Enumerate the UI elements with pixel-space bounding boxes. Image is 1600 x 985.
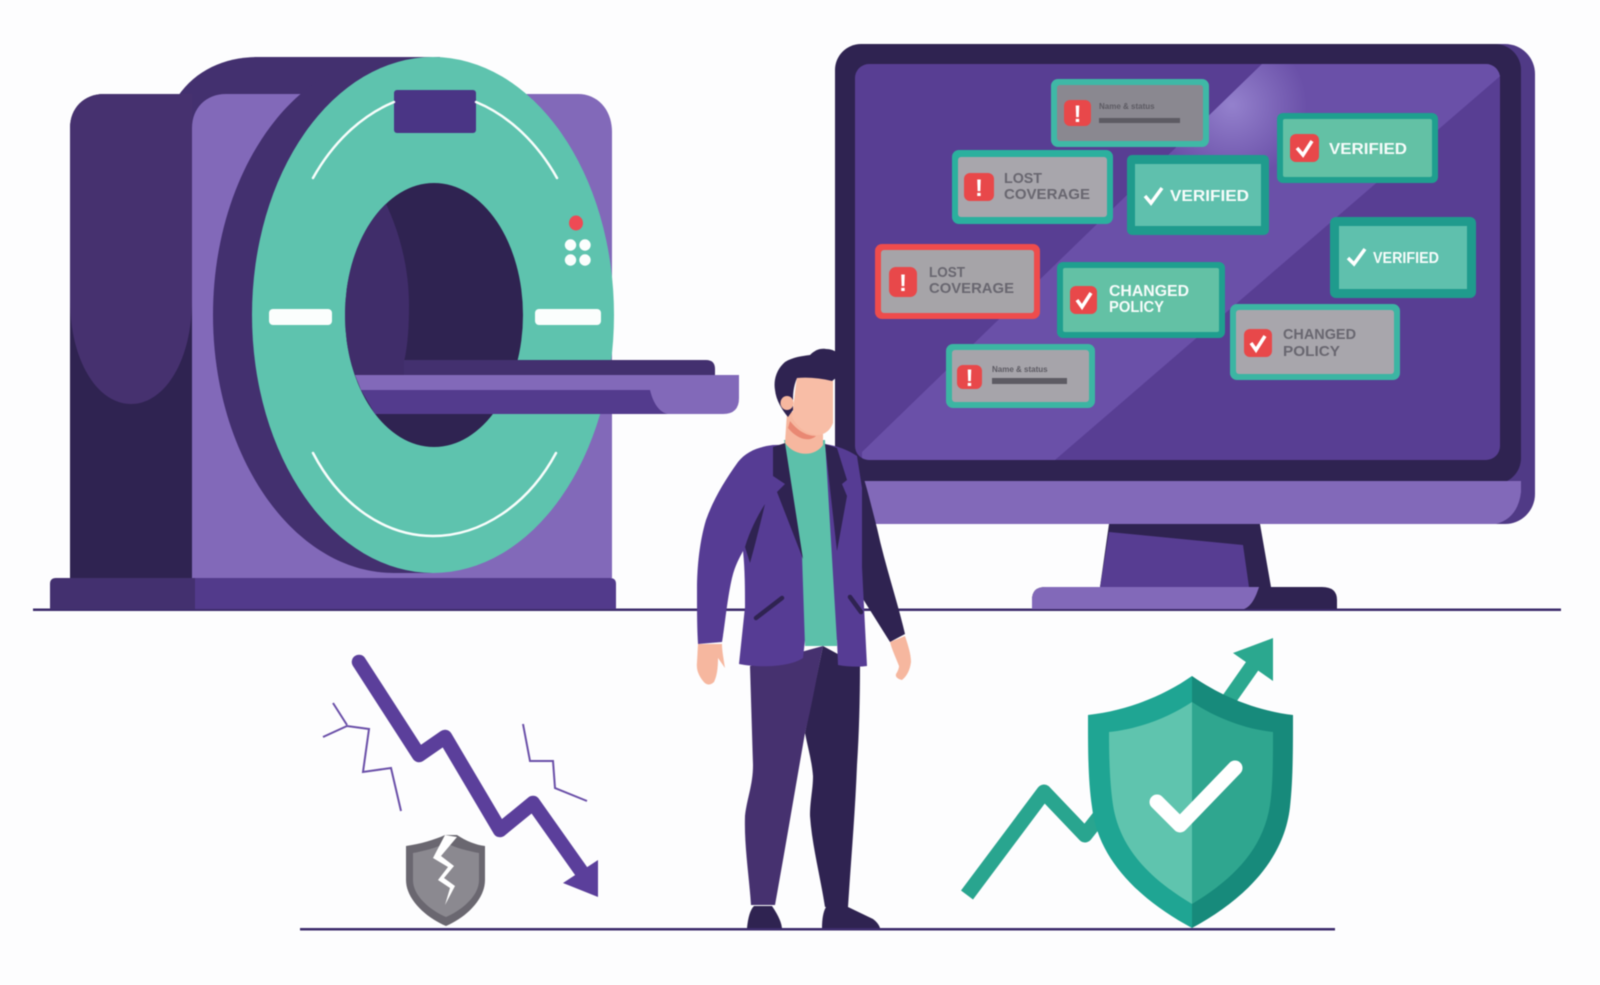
person: ear (780, 396, 794, 410)
down arrow (359, 662, 598, 897)
person: pockets (756, 597, 861, 618)
card: changed policy grey: POLICY (1283, 343, 1340, 360)
scanner: light body (192, 94, 612, 578)
upper floor line (33, 608, 1561, 611)
card: changed policy green: POLICY (1109, 299, 1164, 316)
person: neck shadow (788, 421, 816, 439)
card: unlabelled alert top: ! (1074, 101, 1082, 128)
person: left leg (745, 646, 823, 905)
card: lost coverage red (875, 244, 1040, 319)
card: verified top right: VERIFIED (1329, 141, 1407, 158)
scanner: white arcs (313, 102, 557, 536)
card: lost coverage (952, 150, 1113, 224)
scanner machine (50, 57, 739, 609)
card: changed policy grey: CHANGED (1283, 326, 1356, 343)
scanner: ring front (252, 57, 614, 573)
crack lines (323, 703, 587, 811)
scanner: bore (340, 180, 523, 447)
person: lapels (773, 443, 847, 559)
lower floor line (300, 928, 1335, 930)
scanner: ring side (213, 57, 433, 573)
monitor: chin (850, 481, 1521, 524)
card: verified top right (1277, 113, 1438, 183)
card: lost coverage: COVERAGE (1004, 186, 1090, 203)
card: changed policy green: CHANGED (1109, 283, 1189, 300)
upward trend with check shield (967, 638, 1293, 928)
card: changed policy grey (1230, 304, 1400, 380)
person: t-shirt (784, 440, 837, 646)
card: unlabelled alert bottom (946, 344, 1095, 408)
rising arrow (967, 638, 1273, 895)
scanner: base plate (50, 578, 616, 609)
scanner: patient table (355, 360, 739, 414)
person: neck (785, 412, 823, 454)
downward trend with broken shield (323, 662, 598, 926)
monitor (835, 30, 1535, 609)
monitor: stand base (1032, 587, 1337, 609)
check shield (1088, 676, 1293, 928)
card: unlabelled alert top: Name & status (1099, 102, 1155, 111)
card: lost coverage red: ! (899, 270, 907, 297)
person: jacket fold (745, 504, 765, 563)
monitor: screen (855, 30, 1505, 460)
scanner: white side bars (269, 309, 601, 325)
person: jacket (697, 444, 867, 667)
person: face (792, 376, 833, 435)
card: verified right: VERIFIED (1373, 250, 1439, 267)
person (697, 349, 911, 928)
broken shield (406, 835, 485, 926)
card: verified centre: VERIFIED (1170, 188, 1249, 205)
card: changed policy green (1057, 262, 1225, 338)
monitor: stand neck (1100, 524, 1271, 587)
card: lost coverage: LOST (1004, 170, 1042, 187)
scanner: status light (569, 216, 583, 230)
person: far sleeve (850, 456, 905, 642)
person: hands (697, 636, 911, 685)
scanner: top panel (394, 90, 476, 133)
card: lost coverage red: LOST (929, 264, 965, 281)
person: shoes (747, 906, 880, 928)
card: lost coverage red: COVERAGE (929, 280, 1014, 297)
scanner: button dots (565, 239, 591, 266)
card: unlabelled alert bottom: ! (966, 365, 974, 392)
monitor: frame (835, 44, 1535, 524)
person: right leg (805, 646, 860, 907)
scanner: rear housing (178, 57, 440, 200)
card: verified centre (1127, 155, 1269, 235)
person: hair (775, 349, 843, 417)
card: unlabelled alert bottom: Name & status (992, 365, 1048, 374)
card: verified right (1330, 217, 1476, 298)
card: unlabelled alert top (1051, 79, 1209, 147)
card: lost coverage: ! (975, 175, 983, 202)
